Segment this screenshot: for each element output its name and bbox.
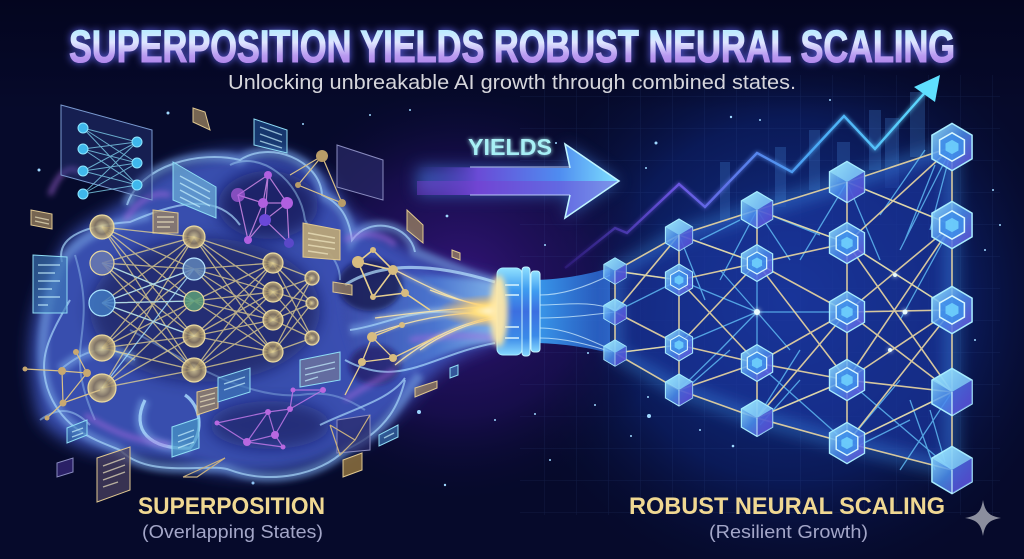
transition tube: [490, 267, 615, 356]
floating data cards: [31, 105, 460, 502]
purple cluster top: [231, 171, 294, 248]
collar detail: [505, 285, 519, 338]
gold cluster right: [352, 247, 430, 310]
subtitle: Unlocking unbreakable AI growth through combined states.: [228, 72, 796, 94]
light flare: [754, 273, 908, 352]
mouth glow: [490, 275, 508, 347]
small satellite networks: [22, 150, 440, 477]
label: superposition: [138, 493, 325, 542]
growth arrow line: [565, 75, 940, 268]
stream converging into tube: [370, 270, 498, 365]
network glow: [615, 147, 952, 470]
yields arrow: [417, 144, 619, 218]
gold cluster lower left: [22, 349, 100, 420]
tan cards: [31, 108, 460, 502]
column 4 nodes: [829, 161, 865, 464]
cloud swirl outlines: [40, 152, 495, 477]
cloud haze bands: [43, 152, 495, 477]
growth bars: [720, 92, 925, 222]
label: superposition: (Overlapping States): [142, 521, 323, 542]
left neural network: [88, 215, 319, 402]
column 5 nodes: [932, 123, 972, 494]
yields label: YIELDS: [468, 134, 552, 160]
label: robust neural scaling: ROBUST NEURAL SCALING: [629, 493, 945, 520]
column 3 nodes: [741, 192, 773, 436]
network glass fill: [615, 147, 952, 470]
neck fibres: [540, 275, 615, 352]
blue connections: [615, 147, 952, 470]
gold cluster top right: [290, 150, 346, 207]
dark cards: [57, 145, 383, 477]
gold connections: [615, 147, 952, 470]
card text lines: [35, 127, 394, 487]
big network card: [61, 105, 152, 200]
purple smoke accents: [50, 169, 495, 445]
grey gold cluster bottom: [183, 415, 370, 477]
connection lines: [102, 227, 312, 388]
cloud body: [30, 152, 497, 475]
blue cards: [33, 119, 458, 457]
right crystal network: [604, 123, 972, 494]
gold cluster lower right: [345, 322, 440, 395]
label: robust neural scaling: [629, 493, 945, 542]
collar rings: [497, 268, 522, 355]
accent blue links: [102, 263, 194, 388]
left panel: superposition cloud: [30, 152, 553, 477]
purple cluster bottom: [214, 387, 326, 450]
tube light core: [437, 294, 553, 328]
neck: [530, 268, 610, 353]
column 1 nodes: [604, 258, 626, 366]
label: robust neural scaling: (Resilient Growth): [709, 521, 868, 542]
icon: sparkle watermark: [965, 500, 1001, 536]
starfield: [38, 99, 1001, 486]
label: superposition: SUPERPOSITION: [138, 493, 325, 520]
network nodes: [88, 215, 319, 402]
column 2 nodes: [665, 219, 693, 406]
